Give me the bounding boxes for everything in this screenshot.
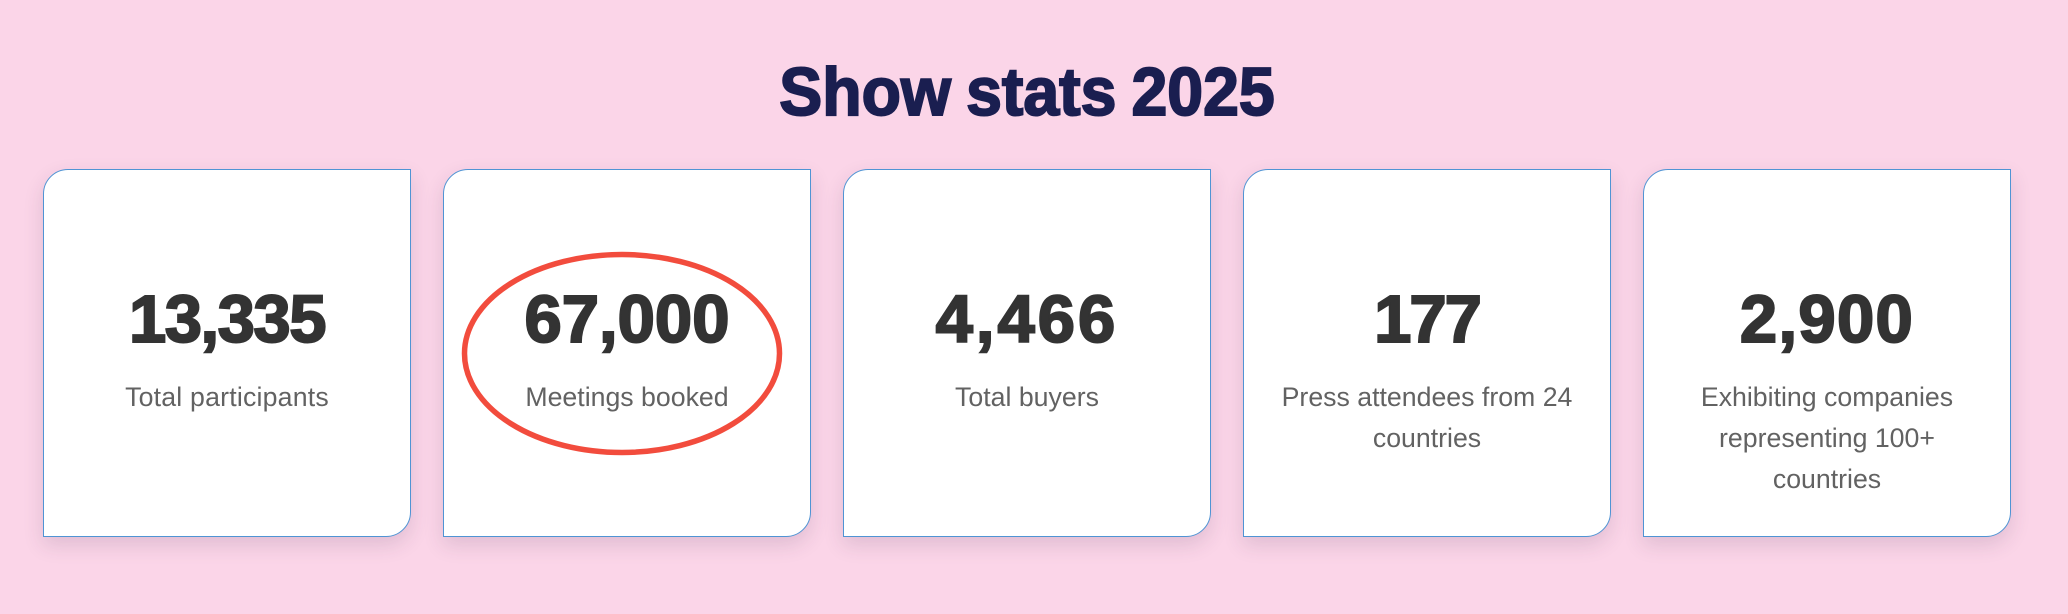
panel: exhibiting companies	[1643, 169, 2011, 537]
panel: total participants	[43, 169, 411, 537]
label: exhibiting companies: Exhibiting companies representing 100+ countries	[1701, 382, 1953, 494]
panel: press attendees	[1243, 169, 1611, 537]
number: 13,335: 13,335	[129, 282, 325, 357]
panel: meetings booked	[443, 169, 811, 537]
number: 4,466: 4,466	[936, 282, 1118, 357]
number: 67,000: 67,000	[525, 282, 729, 357]
panel: total buyers	[843, 169, 1211, 537]
title: Show stats 2025	[779, 54, 1275, 130]
label: total participants: Total participants	[125, 382, 329, 412]
number: 2,900: 2,900	[1740, 282, 1914, 357]
number: 177: 177	[1374, 282, 1480, 357]
label: press attendees: Press attendees from 24 countries	[1282, 382, 1572, 453]
label: meetings booked: Meetings booked	[525, 382, 729, 412]
label: total buyers: Total buyers	[955, 382, 1099, 412]
